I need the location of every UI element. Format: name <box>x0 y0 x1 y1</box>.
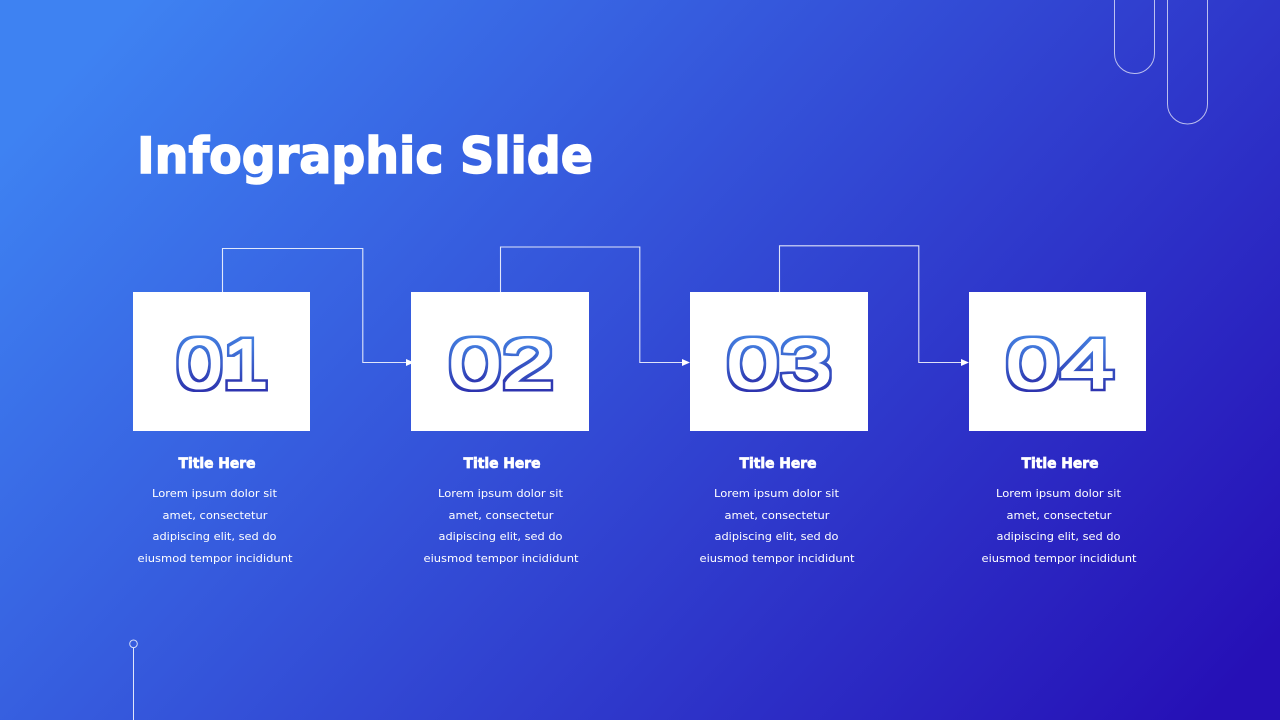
number card 4 <box>969 292 1146 431</box>
step 2 <box>411 292 589 565</box>
number 02: 02 <box>448 325 554 403</box>
number card 1 <box>133 292 310 431</box>
number 03: 03 <box>726 325 832 403</box>
connector arrow 2 to 3 <box>500 247 690 366</box>
step 4 <box>969 292 1146 565</box>
step 3 <box>690 292 868 565</box>
step 3 description <box>700 487 855 565</box>
step 4 description: adipiscing elit, sed do <box>996 530 1121 543</box>
number card 2 <box>411 292 589 431</box>
step 2 description: eiusmod tempor incididunt <box>424 552 579 565</box>
number 04: 04 <box>1006 325 1114 403</box>
step 3 description: amet, consectetur <box>724 509 830 522</box>
step 2 description <box>424 487 579 565</box>
connector arrow 3 to 4 <box>780 246 969 366</box>
step 1 description: Lorem ipsum dolor sit <box>152 487 278 500</box>
connector arrow 1 to 2 <box>222 248 414 366</box>
step 1 description: amet, consectetur <box>162 509 268 522</box>
step 1 description: eiusmod tempor incididunt <box>138 552 293 565</box>
step 1 description <box>138 487 293 565</box>
step 3 title: Title Here <box>740 456 816 472</box>
step 2 description: adipiscing elit, sed do <box>438 530 563 543</box>
step 4 description: amet, consectetur <box>1006 509 1112 522</box>
step 1 description: adipiscing elit, sed do <box>152 530 277 543</box>
decorative pin line <box>130 640 137 720</box>
step 4 title: Title Here <box>1022 456 1098 472</box>
number card 3 <box>690 292 868 431</box>
step 1 title: Title Here <box>178 456 256 472</box>
decorative capsule outlines <box>1114 0 1208 124</box>
step 3 description: eiusmod tempor incididunt <box>700 552 855 565</box>
title: Infographic Slide <box>137 127 593 185</box>
step 3 description: Lorem ipsum dolor sit <box>714 487 840 500</box>
step 4 description: eiusmod tempor incididunt <box>982 552 1137 565</box>
step 4 description: Lorem ipsum dolor sit <box>996 487 1122 500</box>
step 2 description: Lorem ipsum dolor sit <box>438 487 564 500</box>
step 2 description: amet, consectetur <box>448 509 554 522</box>
step 2 title: Title Here <box>464 456 540 472</box>
step 4 description <box>982 487 1137 565</box>
step 3 description: adipiscing elit, sed do <box>714 530 839 543</box>
step 1 <box>133 292 310 565</box>
number 01: 01 <box>176 325 268 403</box>
